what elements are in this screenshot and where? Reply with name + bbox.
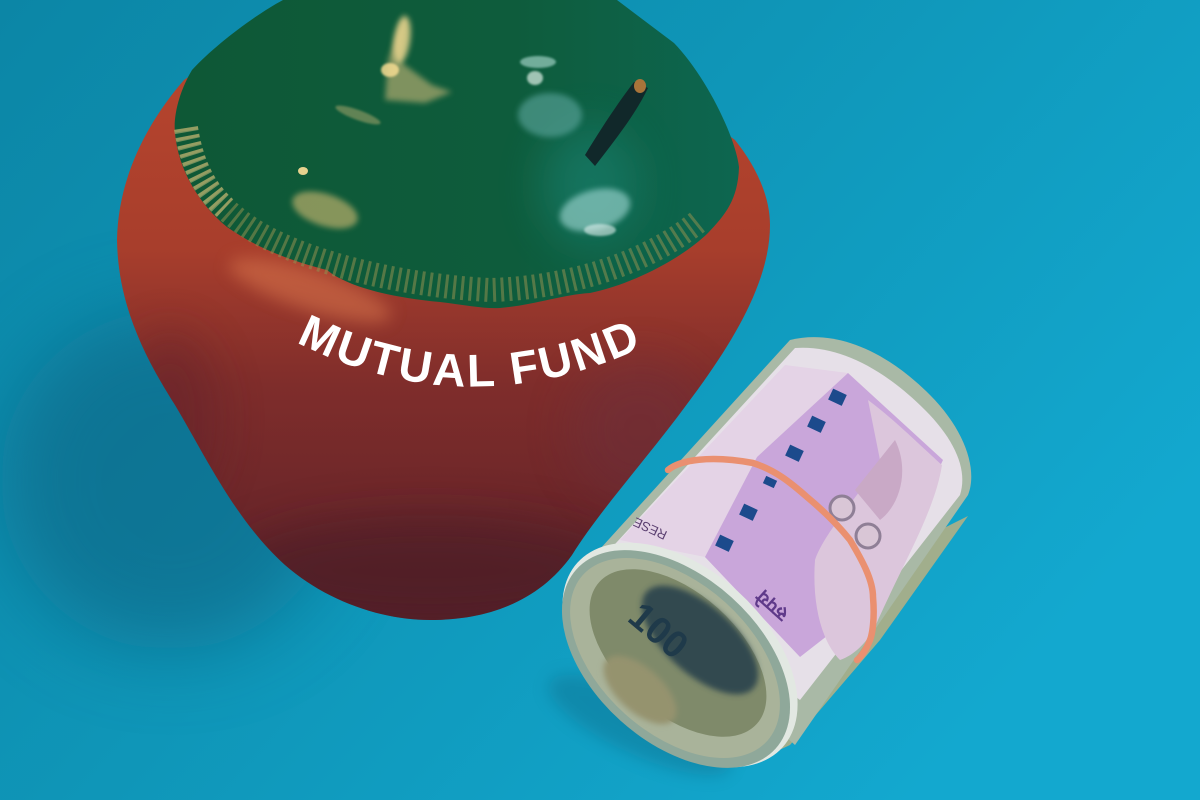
portrait on note — [814, 400, 942, 660]
roll cylinder outer edge — [590, 337, 971, 745]
white margin of note — [605, 348, 962, 700]
roll end interior — [559, 537, 797, 769]
numerals on rolled note: 100 — [620, 595, 696, 668]
green painted top — [175, 0, 739, 308]
note text: रुपये — [750, 584, 794, 627]
pale left area of note with seal and text — [620, 365, 848, 557]
money roll — [520, 337, 971, 800]
pot label: MUTUAL FUND — [298, 314, 636, 387]
ribbed glazed edge of green paint — [186, 128, 700, 290]
clay highlight — [228, 254, 394, 328]
gloss highlights on green — [288, 12, 638, 245]
blue security squares — [715, 389, 847, 552]
clay pot — [117, 0, 770, 625]
purple note band — [705, 373, 943, 657]
note text — [631, 514, 794, 627]
rubber band — [668, 459, 874, 660]
pot shadow — [0, 310, 340, 650]
white rim of outer note — [520, 499, 840, 800]
roll end rim — [521, 508, 831, 800]
pot body — [117, 0, 770, 620]
note text: RESE — [631, 514, 669, 543]
coin slot — [585, 82, 648, 166]
money roll shadow — [537, 656, 743, 794]
loose note beneath roll — [745, 516, 968, 766]
